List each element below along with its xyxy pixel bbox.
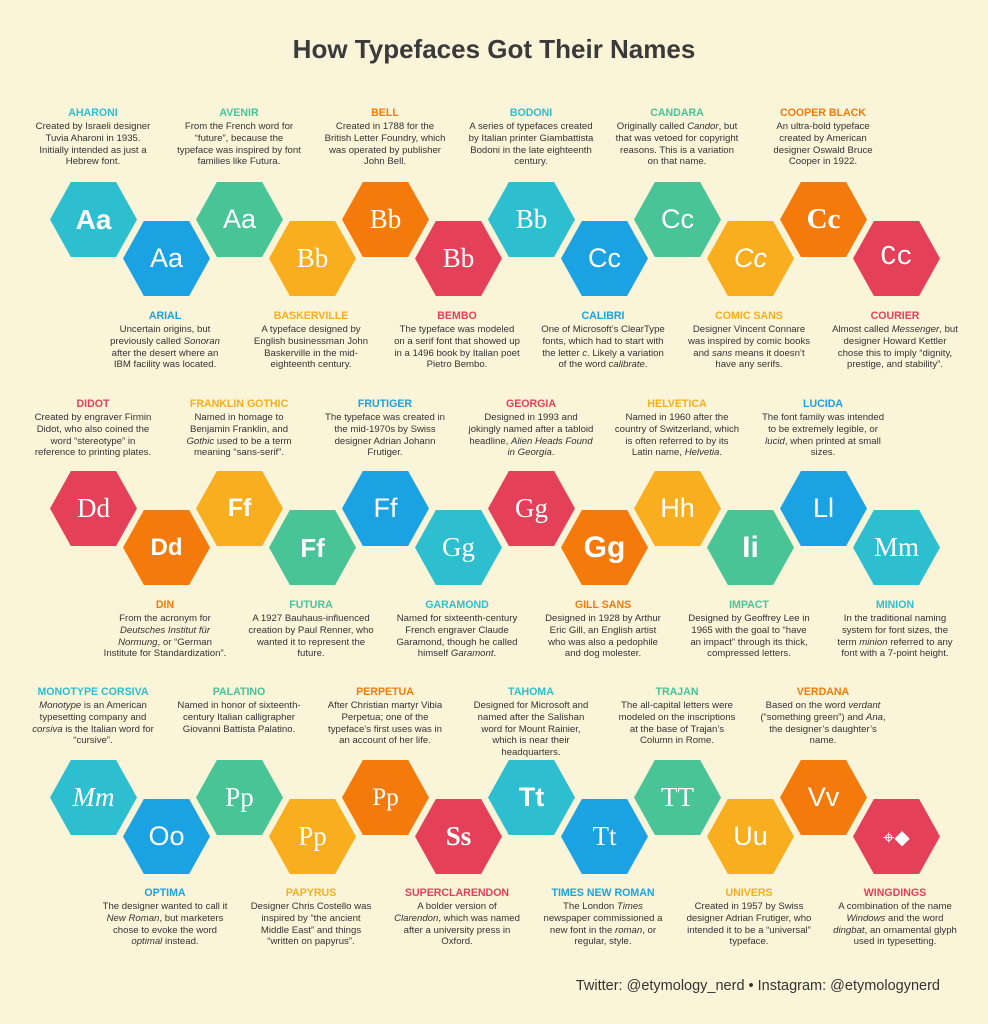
- row 3 top text: Tahoma: TAHOMA: [508, 686, 554, 698]
- row 2 top text: Helvetica: Named in 1960 after the country of Switzerland, which is often referred to by its Latin name, Helvetia.: [615, 412, 739, 458]
- row 1 bottom text: Calibri: One of Microsoft’s ClearType fonts, which had to start with the letter c. Likely a variation of the word calibrate.: [541, 324, 665, 370]
- row 2 bottom text: Minion: MINION: [876, 599, 914, 611]
- hex: Bembo: Bb: [443, 243, 474, 273]
- row 2 bottom text: Impact: IMPACT: [729, 599, 769, 611]
- row 3 top text: Perpetua: After Christian martyr Vibia Perpetua; one of the typeface’s first uses was in an account of her life.: [328, 700, 442, 746]
- hex: Didot: Dd: [77, 493, 110, 523]
- row 2 top text: Didot: Created by engraver Firmin Didot, who also coined the word “stereotype” in reference to printing plates.: [35, 412, 151, 458]
- hex: Lucida: Ll: [813, 493, 834, 523]
- row 2 bottom text: Garamond: GARAMOND: [425, 599, 489, 611]
- row 2 bottom text: DIN: From the acronym for Deutsches Institut für Normung, or “German Institute for Standardization”.: [104, 613, 226, 659]
- row 2 bottom text: Futura: FUTURA: [289, 599, 333, 611]
- hex: Helvetica: [634, 471, 721, 546]
- row 2 top text: Frutiger: FRUTIGER: [358, 398, 412, 410]
- row 2 top text: Georgia: Designed in 1993 and jokingly named after a tabloid headline, Alien Heads Found in Georgia.: [469, 412, 593, 458]
- hex: Wingdings: ⌖◆: [883, 824, 910, 848]
- hex: Papyrus: Pp: [298, 821, 327, 851]
- hex: Arial: Aa: [150, 243, 183, 273]
- row 2 bottom text: Impact: Designed by Geoffrey Lee in 1965 with the goal to “have an impact” through its thick, compressed letters.: [688, 613, 810, 659]
- hex: Verdana: [780, 760, 867, 835]
- hex: Lucida: [780, 471, 867, 546]
- row 2 top text: Frutiger: The typeface was created in the mid-1970s by Swiss designer Adrian Johann Frutiger.: [325, 412, 445, 458]
- row 2 hexagons: [50, 471, 940, 585]
- row 2 top text: Lucida: LUCIDA: [803, 398, 843, 410]
- hex: Verdana: Vv: [808, 782, 839, 812]
- row 3 top text: Trajan: TRAJAN: [656, 686, 698, 698]
- row 3 bottom text: Papyrus: Designer Chris Costello was inspired by “the ancient Middle East” and things “written on papyrus”.: [251, 901, 371, 947]
- hex: Tahoma: [488, 760, 575, 835]
- row 1 top text: Aharoni: Created by Israeli designer Tuvia Aharoni in 1935. Initially intended as just a Hebrew font.: [36, 121, 150, 167]
- row 1 bottom text: Bembo: BEMBO: [437, 310, 477, 322]
- row 1 top text: Candara: Originally called Candor, but that was vetoed for copyright reasons. This is a variation on that name.: [616, 121, 738, 167]
- row 2 bottom text: Gill Sans: GILL SANS: [575, 599, 631, 611]
- hex: Aharoni: [50, 182, 137, 257]
- row 2 top text: Helvetica: HELVETICA: [647, 398, 707, 410]
- hex: Minion: [853, 510, 940, 585]
- hex: Futura: [269, 510, 356, 585]
- row 1 top text: Bodoni: BODONI: [510, 107, 552, 119]
- row 3 bottom text: Univers: UNIVERS: [725, 887, 773, 899]
- row 3 top text: Tahoma: Designed for Microsoft and named after the Salishan word for Mount Rainier, which is near their headquarters.: [474, 700, 588, 758]
- hex: Monotype Corsiva: [50, 760, 137, 835]
- row 3 bottom text: Univers: Created in 1957 by Swiss designer Adrian Frutiger, who intended it to be a “universal” typeface.: [687, 901, 811, 947]
- row 3 bottom text: Papyrus: PAPYRUS: [286, 887, 336, 899]
- hex: Garamond: Gg: [442, 532, 475, 562]
- hex: Times New Roman: [561, 799, 648, 874]
- hex: Aharoni: Aa: [76, 204, 111, 234]
- title: How Typefaces Got Their Names: [293, 34, 695, 64]
- hex: Futura: Ff: [300, 532, 325, 562]
- hex: Tahoma: Tt: [519, 782, 544, 812]
- hex: Courier: Cc: [880, 243, 913, 273]
- row 2 top text: Franklin Gothic: Named in homage to Benjamin Franklin, and Gothic used to be a term meaning “sans-serif”.: [186, 412, 292, 458]
- hex: Georgia: Gg: [515, 493, 548, 523]
- row 2 top text: Franklin Gothic: FRANKLIN GOTHIC: [190, 398, 288, 410]
- hex: Optima: Oo: [148, 821, 185, 851]
- hex: Perpetua: Pp: [372, 784, 399, 811]
- hex: Baskerville: [269, 221, 356, 296]
- row 1 top text: Bell: Created in 1788 for the British Letter Foundry, which was operated by publisher John Bell.: [325, 121, 445, 167]
- row 1 bottom text: Courier: COURIER: [871, 310, 919, 322]
- hex: Didot: [50, 471, 137, 546]
- hex: Papyrus: [269, 799, 356, 874]
- hex: Arial: [123, 221, 210, 296]
- row 3 bottom text: Times New Roman: TIMES NEW ROMAN: [552, 887, 654, 899]
- hex: Wingdings: [853, 799, 940, 874]
- hex: Minion: Mm: [874, 532, 919, 562]
- row 1 top text: Avenir: AVENIR: [219, 107, 259, 119]
- hex: Impact: Ii: [742, 530, 759, 564]
- hex: Comic Sans: Cc: [734, 243, 767, 273]
- hex: Bembo: [415, 221, 502, 296]
- row 2 top text: Georgia: GEORGIA: [506, 398, 556, 410]
- row 3 bottom text: Optima: OPTIMA: [144, 887, 186, 899]
- hex: Helvetica: Hh: [660, 493, 695, 523]
- hex: Gill Sans: Gg: [584, 530, 625, 564]
- hex: Palatino: [196, 760, 283, 835]
- row 3 bottom text: Superclarendon: SUPERCLARENDON: [405, 887, 509, 899]
- hex: Georgia: [488, 471, 575, 546]
- hex: Courier: [853, 221, 940, 296]
- hex: Univers: Uu: [733, 821, 768, 851]
- hex: Garamond: [415, 510, 502, 585]
- hex: Franklin Gothic: [196, 471, 283, 546]
- row 1 bottom text: Arial: Uncertain origins, but previously called Sonoran after the desert where an IBM facility was located.: [110, 324, 220, 370]
- row 2 bottom text: Futura: A 1927 Bauhaus-influenced creation by Paul Renner, who wanted it to represent the future.: [248, 613, 374, 659]
- row 1 top text: Avenir: From the French word for “future”, because the typeface was inspired by font families like Futura.: [177, 121, 301, 167]
- row 3 top text: Monotype Corsiva: MONOTYPE CORSIVA: [37, 686, 149, 698]
- hex: Trajan: TT: [661, 782, 694, 812]
- row 2 bottom text: Minion: In the traditional naming system for font sizes, the term minion referred to any font with a 7-point height.: [837, 613, 953, 659]
- hex: DIN: Dd: [150, 534, 182, 560]
- row 1 bottom text: Comic Sans: Designer Vincent Connare was inspired by comic books and sans means it doesn’t have any serifs.: [688, 324, 810, 370]
- hex: Perpetua: [342, 760, 429, 835]
- hex: Candara: Cc: [661, 204, 694, 234]
- hex: DIN: [123, 510, 210, 585]
- hex: Cooper Black: [780, 182, 867, 257]
- row 3 bottom text: Optima: The designer wanted to call it New Roman, but marketers chose to evoke the word optimal instead.: [103, 901, 227, 947]
- row 1 top text: Bell: BELL: [371, 107, 399, 119]
- hex: Impact: [707, 510, 794, 585]
- row 2 top text: Lucida: The font family was intended to be extremely legible, or lucid, when printed at small sizes.: [762, 412, 884, 458]
- row 3 top text: Palatino: PALATINO: [213, 686, 265, 698]
- row 3 top text: Perpetua: PERPETUA: [356, 686, 414, 698]
- row 3 top text: Trajan: The all-capital letters were modeled on the inscriptions at the base of Trajan’s Column in Rome.: [619, 700, 735, 746]
- row 1 top text: Cooper Black: COOPER BLACK: [780, 107, 866, 119]
- row 1 top text: Bodoni: A series of typefaces created by Italian printer Giambattista Bodoni in the late eighteenth century.: [469, 121, 593, 167]
- hex: Franklin Gothic: Ff: [228, 494, 251, 522]
- hex: Times New Roman: Tt: [592, 821, 616, 851]
- hex: Bell: [342, 182, 429, 257]
- row 3 top text: Monotype Corsiva: Monotype is an American typesetting company and corsiva is the Italian word for “cursive”.: [32, 700, 154, 746]
- row 1 top text: Aharoni: AHARONI: [68, 107, 118, 119]
- row 3 top text: Palatino: Named in honor of sixteenth-century Italian calligrapher Giovanni Battista Palatino.: [177, 700, 301, 735]
- hex: Trajan: [634, 760, 721, 835]
- hex: Baskerville: Bb: [297, 243, 328, 273]
- row 1 top text: Cooper Black: An ultra-bold typeface created by American designer Oswald Bruce Cooper in 1922.: [773, 121, 873, 167]
- row 3 bottom text: Times New Roman: The London Times newspaper commissioned a new font in the roman, or regular, style.: [544, 901, 662, 947]
- row 1 bottom text: Bembo: The typeface was modeled on a serif font that showed up in a 1496 book by Italian poet Pietro Bembo.: [394, 324, 520, 370]
- hex: Bell: Bb: [370, 204, 401, 234]
- hex: Superclarendon: [415, 799, 502, 874]
- row 1 top text: Candara: CANDARA: [650, 107, 704, 119]
- row 2 bottom text: DIN: DIN: [156, 599, 174, 611]
- hex: Palatino: Pp: [225, 782, 254, 812]
- row 3 bottom text: Wingdings: A combination of the name Windows and the word dingbat, an ornamental glyph used in typesetting.: [833, 901, 957, 947]
- row 3 top text: Verdana: VERDANA: [797, 686, 849, 698]
- hex: Monotype Corsiva: Mm: [72, 782, 114, 812]
- row 1 bottom text: Courier: Almost called Messenger, but designer Howard Kettler chose this to imply “dignity, prestige, and stability”.: [832, 324, 958, 370]
- hex: Frutiger: Ff: [374, 493, 398, 523]
- hex: Bodoni: Bb: [516, 204, 547, 234]
- row 1 bottom text: Baskerville: BASKERVILLE: [274, 310, 348, 322]
- hex: Superclarendon: Ss: [446, 821, 471, 851]
- hex: Optima: [123, 799, 210, 874]
- hex: Frutiger: [342, 471, 429, 546]
- row 3 bottom text: Wingdings: WINGDINGS: [864, 887, 926, 899]
- footer credits: Twitter: @etymology_nerd • Instagram: @etymologynerd: [576, 978, 940, 994]
- hex: Comic Sans: [707, 221, 794, 296]
- row 1 hexagons: [50, 182, 940, 296]
- hex: Candara: [634, 182, 721, 257]
- hex: Avenir: Aa: [223, 204, 256, 234]
- row 2 bottom text: Garamond: Named for sixteenth-century French engraver Claude Garamond, though he called himself Garamont.: [396, 613, 518, 659]
- row 1 bottom text: Calibri: CALIBRI: [582, 310, 624, 322]
- row 3 hexagons: [50, 760, 940, 874]
- hex: Calibri: Cc: [588, 243, 621, 273]
- row 1 bottom text: Comic Sans: COMIC SANS: [715, 310, 783, 322]
- row 1 bottom text: Arial: ARIAL: [149, 310, 181, 322]
- row 2 bottom text: Gill Sans: Designed in 1928 by Arthur Eric Gill, an English artist who was also a pedophile and dog molester.: [545, 613, 661, 659]
- row 3 top text: Verdana: Based on the word verdant (“something green”) and Ana, the designer’s daughter’s name.: [760, 700, 886, 746]
- row 2 top text: Didot: DIDOT: [77, 398, 109, 410]
- hex: Cooper Black: Cc: [807, 203, 840, 235]
- hex: Bodoni: [488, 182, 575, 257]
- hex: Avenir: [196, 182, 283, 257]
- hex: Gill Sans: [561, 510, 648, 585]
- hex: Calibri: [561, 221, 648, 296]
- hex: Univers: [707, 799, 794, 874]
- row 1 bottom text: Baskerville: A typeface designed by English businessman John Baskerville in the mid-eighteenth century.: [254, 324, 368, 370]
- row 3 bottom text: Superclarendon: A bolder version of Clarendon, which was named after a university press in Oxford.: [394, 901, 520, 947]
